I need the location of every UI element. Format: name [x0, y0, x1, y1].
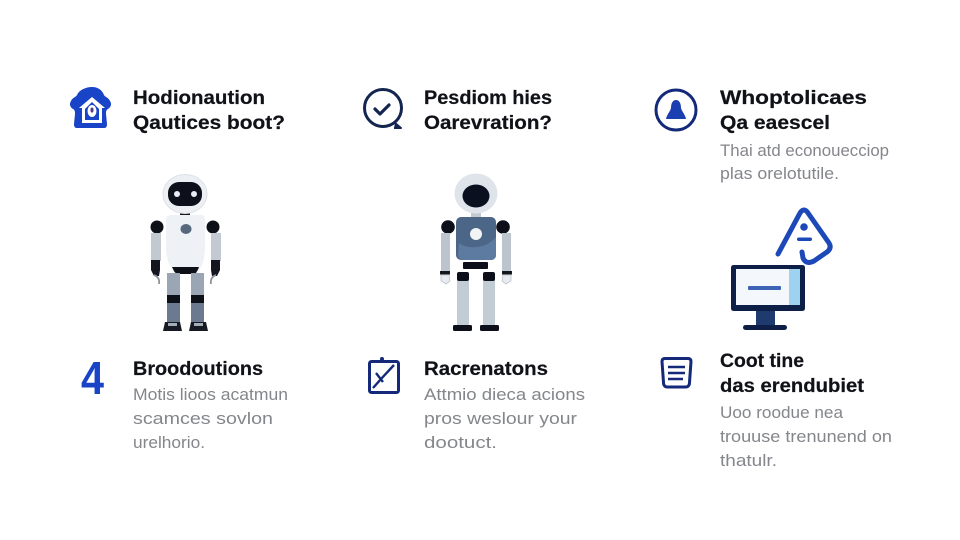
heading: das erendubiet	[720, 376, 865, 397]
icon: number 4: 4	[81, 352, 104, 404]
icon: checked clipboard	[370, 358, 398, 392]
body text	[720, 404, 892, 470]
panel: bottom right cost	[662, 351, 892, 470]
body text	[133, 386, 288, 452]
heading	[133, 88, 285, 134]
body text: plas orelotutile.	[720, 165, 839, 183]
body text: Thai atd econouecciop	[720, 142, 889, 160]
heading	[720, 88, 867, 134]
body text: thatulr.	[720, 452, 777, 470]
icon: list document	[662, 358, 691, 387]
body text: pros weslour your	[424, 410, 578, 428]
panel: top right question	[656, 88, 889, 183]
icon: blue house badge	[70, 87, 111, 128]
panel: bottom left solutions	[81, 352, 288, 452]
body text: Motis lioos acatmun	[133, 386, 288, 404]
heading: Pesdiom hies	[424, 88, 552, 109]
body text: scamces sovlon	[133, 410, 273, 428]
heading: Qa eaescel	[720, 113, 830, 134]
heading: Whoptolicaes	[720, 88, 867, 109]
heading	[720, 351, 865, 397]
panel: bottom middle recommendations	[370, 358, 585, 452]
panel: top left question	[70, 87, 285, 134]
body text	[720, 142, 889, 183]
illustration: slate robot	[440, 174, 512, 331]
body text	[424, 386, 585, 452]
icon: check speech bubble	[364, 90, 402, 128]
panel: top middle question	[364, 88, 552, 134]
body text: trouuse trenunend on	[720, 428, 892, 446]
heading: Broodoutions	[133, 359, 263, 380]
heading	[424, 88, 552, 134]
heading: Racrenatons	[424, 359, 548, 380]
body text: Attmio dieca acions	[424, 386, 585, 404]
body text: Uoo roodue nea	[720, 404, 844, 422]
body text: urelhorio.	[133, 434, 205, 452]
heading: Oarevration?	[424, 113, 552, 134]
illustration: white robot	[150, 174, 221, 331]
icon: person in circle	[656, 90, 696, 130]
body text: dootuct.	[424, 434, 497, 452]
heading: Qautices boot?	[133, 113, 285, 134]
illustration: monitor with blue alert icon	[731, 210, 830, 330]
heading: Coot tine	[720, 351, 804, 372]
monitor	[731, 265, 805, 330]
heading: Hodionaution	[133, 88, 265, 109]
icon: blue A-shaped alert	[778, 210, 830, 262]
